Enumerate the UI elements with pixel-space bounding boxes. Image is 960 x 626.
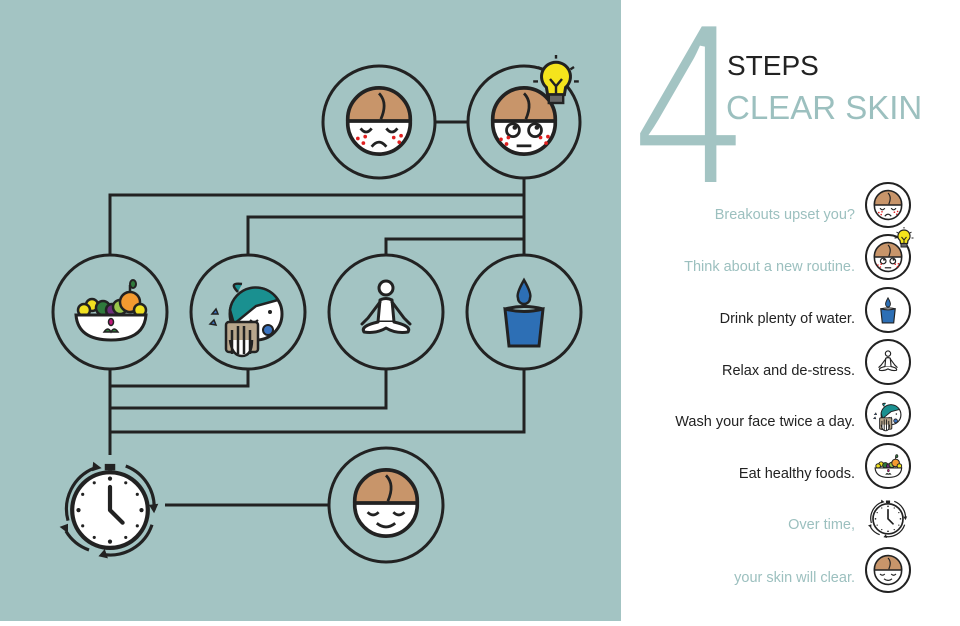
panel: steps list: Eat healthy foods. [739,466,855,482]
icon: clock [60,462,158,558]
panel: steps list [621,0,960,621]
panel: steps list: Over time, [788,517,855,533]
circle: thinking face [468,55,580,178]
panel: steps list: Wash your face twice a day. [675,414,855,430]
heading: steps: STEPS [727,50,819,81]
circle: clear face [329,448,443,562]
circle: yoga [329,255,443,369]
circle: water [467,255,581,369]
title [633,0,922,235]
panel: steps list: Relax and de-stress. [722,363,855,379]
list texts: Breakouts upset you? [715,207,855,223]
heading: clear skin: CLEAR SKIN [726,89,922,126]
panel: steps list: Drink plenty of water. [720,311,855,327]
panel: steps list: Think about a new routine. [684,259,855,275]
connectors [110,122,524,505]
panel: flowchart [0,0,621,621]
panel: steps list: your skin will clear. [734,570,855,586]
circle: breakout face [323,66,435,178]
circle: healthy food [53,255,167,369]
circle: wash face [191,255,305,369]
list icons [865,182,914,593]
